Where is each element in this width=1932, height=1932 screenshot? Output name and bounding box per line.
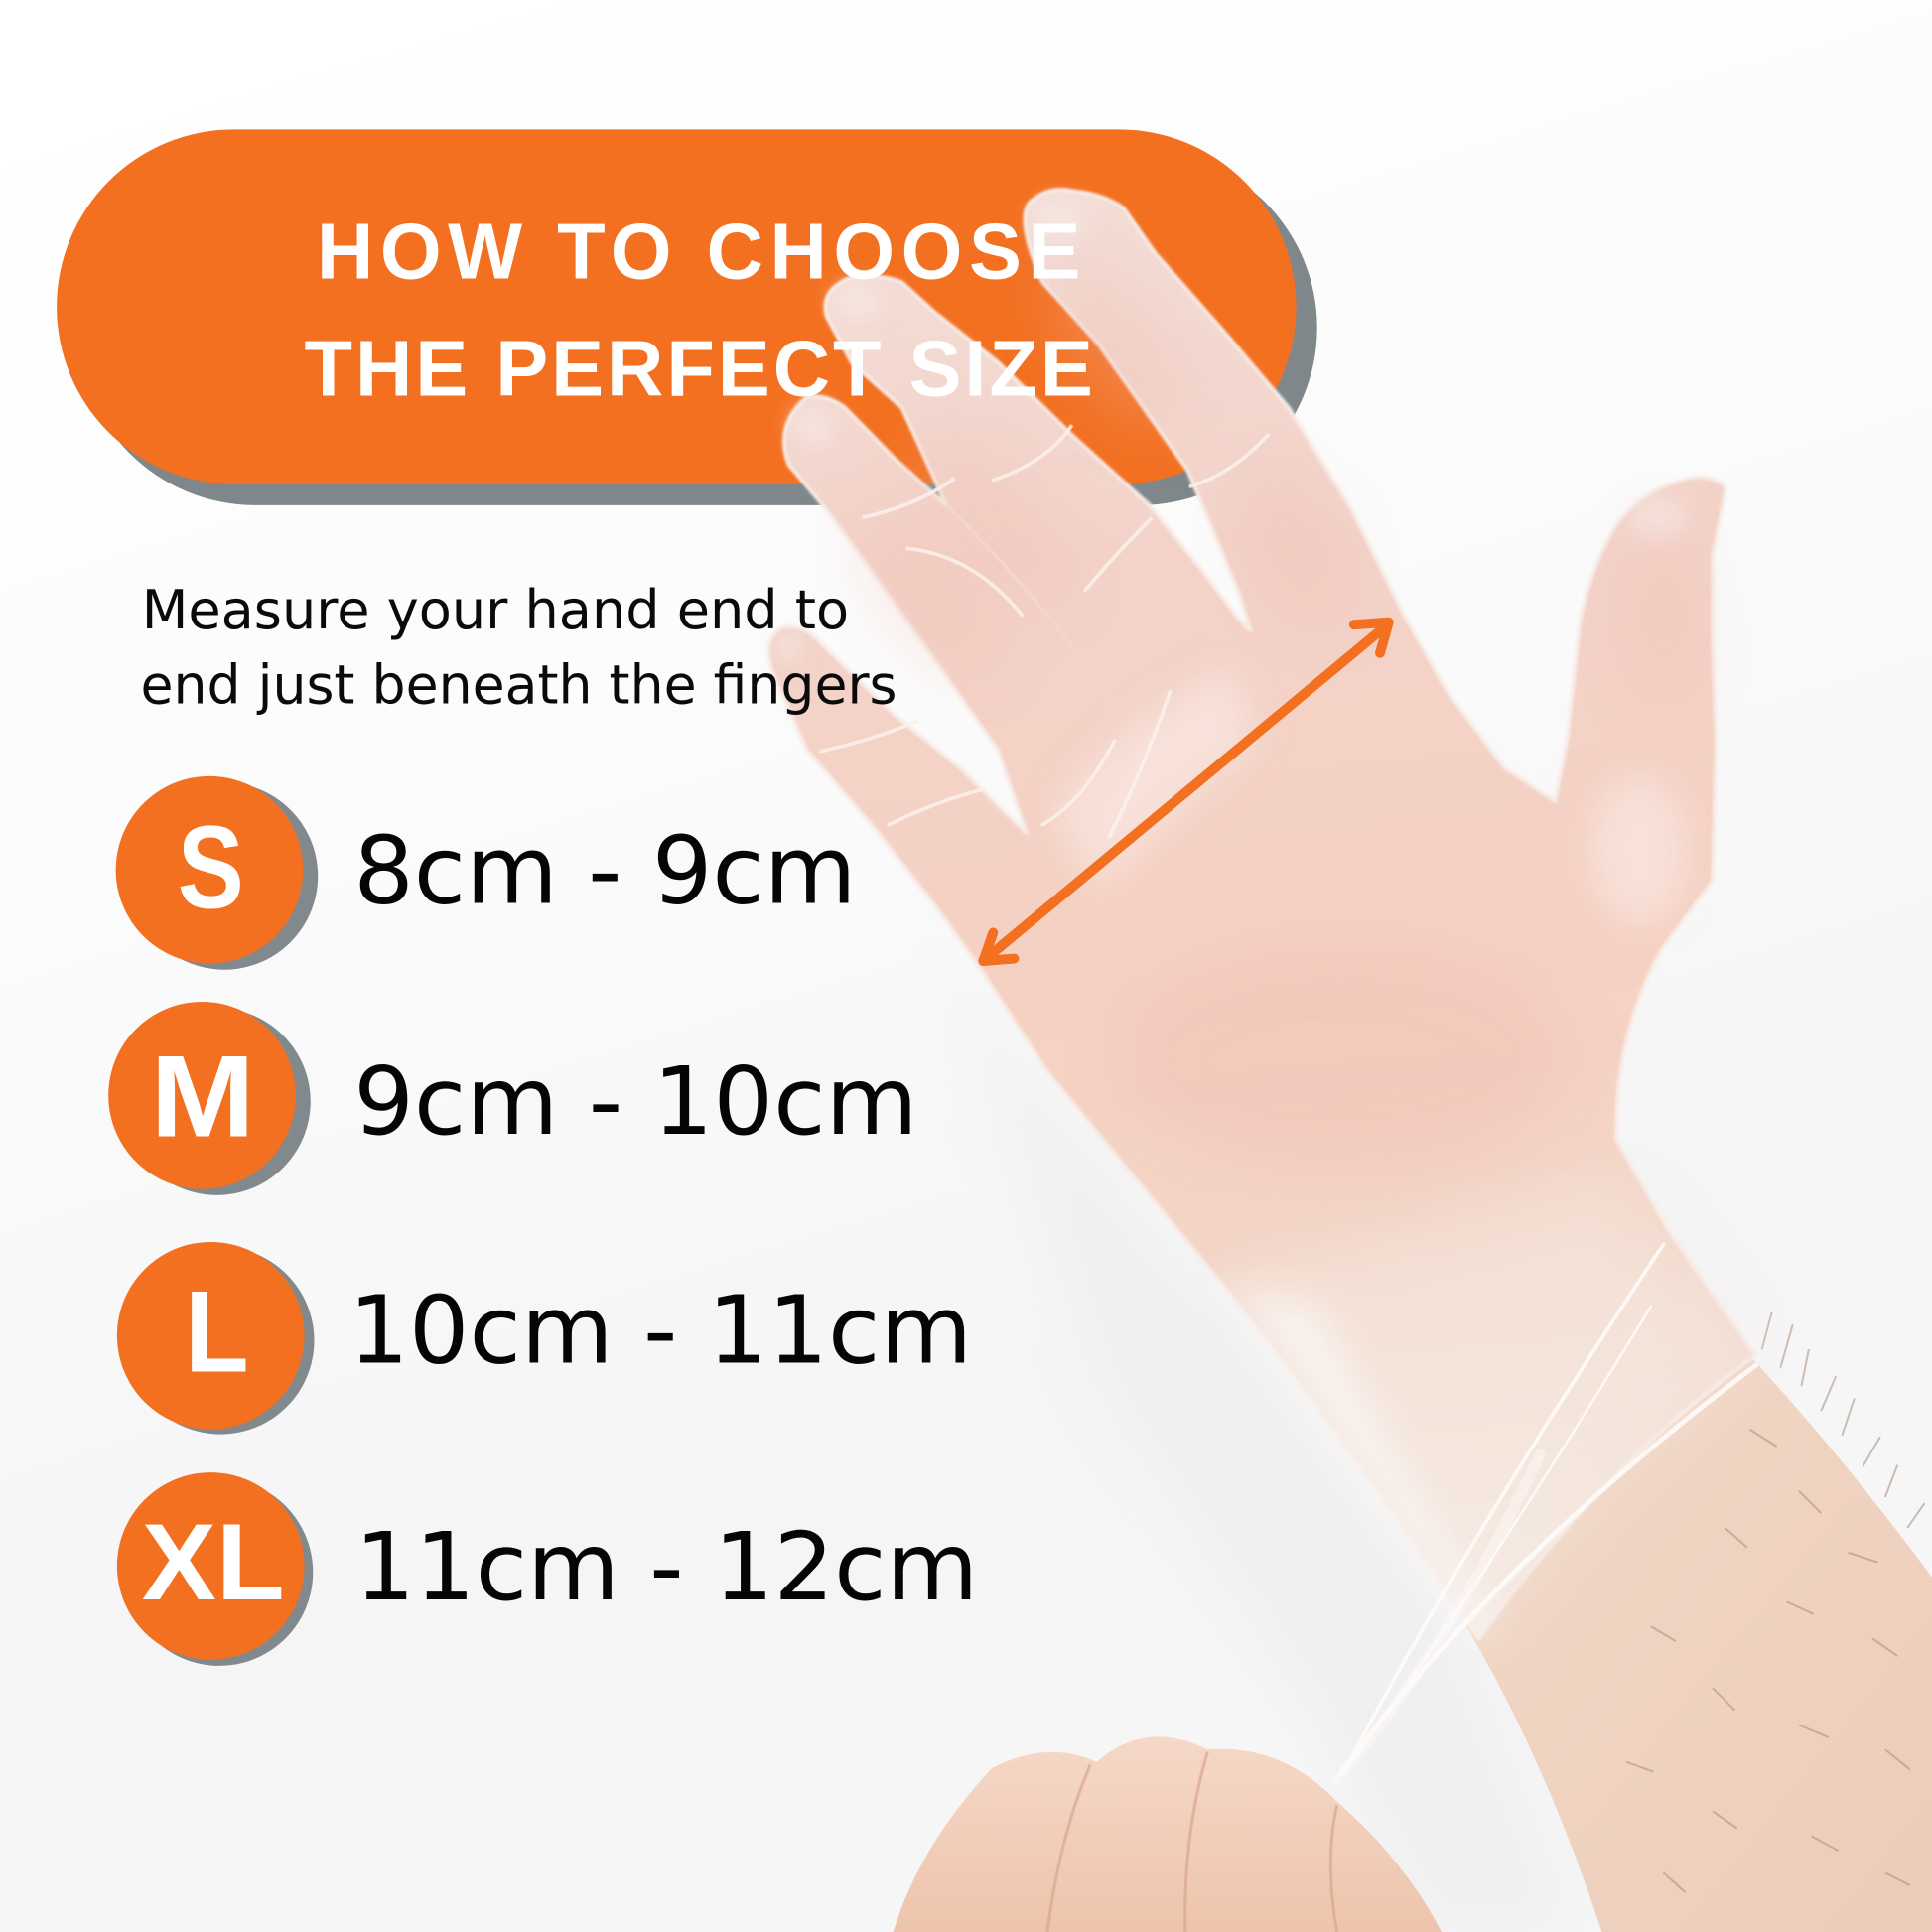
banner pill — [57, 129, 1297, 484]
wrist glove fade — [1220, 1171, 1756, 1639]
soft hand shadow — [936, 949, 1578, 1932]
gloved hand — [768, 190, 1756, 1639]
knuckle lines — [1047, 1752, 1337, 1932]
title text: HOW TO CHOOSE — [317, 207, 1080, 295]
banner shape — [57, 129, 1317, 505]
pink finger and palm tones — [834, 241, 1693, 1171]
double-headed measuring arrow — [983, 622, 1389, 961]
size S row: 8cm - 9cm — [353, 817, 857, 926]
title text — [305, 207, 1093, 412]
size L row: 10cm - 11cm — [348, 1277, 972, 1386]
title text: THE PERFECT SIZE — [305, 324, 1093, 412]
size M row — [108, 1002, 918, 1195]
size M row: 9cm - 10cm — [353, 1047, 918, 1157]
finger tip highlights — [773, 200, 1688, 661]
size L row: L — [185, 1266, 249, 1396]
size S row: S — [178, 802, 244, 934]
arm hair — [1626, 1312, 1925, 1892]
forearm — [1466, 1312, 1932, 1932]
glove creases — [819, 425, 1269, 838]
size XL row: 11cm - 12cm — [354, 1513, 978, 1622]
finger separation line — [946, 505, 1111, 699]
pale stretched left edge — [1220, 1282, 1491, 1639]
size XL row — [117, 1472, 978, 1666]
instruction text — [140, 578, 897, 717]
size XL row: XL — [142, 1502, 285, 1623]
banner shadow — [77, 150, 1317, 505]
size S row — [116, 776, 857, 970]
instruction text: Measure your hand end to — [142, 578, 849, 641]
hand silhouette — [768, 190, 1756, 1639]
pulling fist — [894, 1736, 1442, 1932]
palm pale highlights — [1053, 665, 1686, 924]
stretched glove cuff — [1337, 1244, 1756, 1780]
size M row: M — [150, 1031, 255, 1161]
size L row — [117, 1242, 972, 1435]
instruction text: end just beneath the fingers — [140, 653, 897, 717]
